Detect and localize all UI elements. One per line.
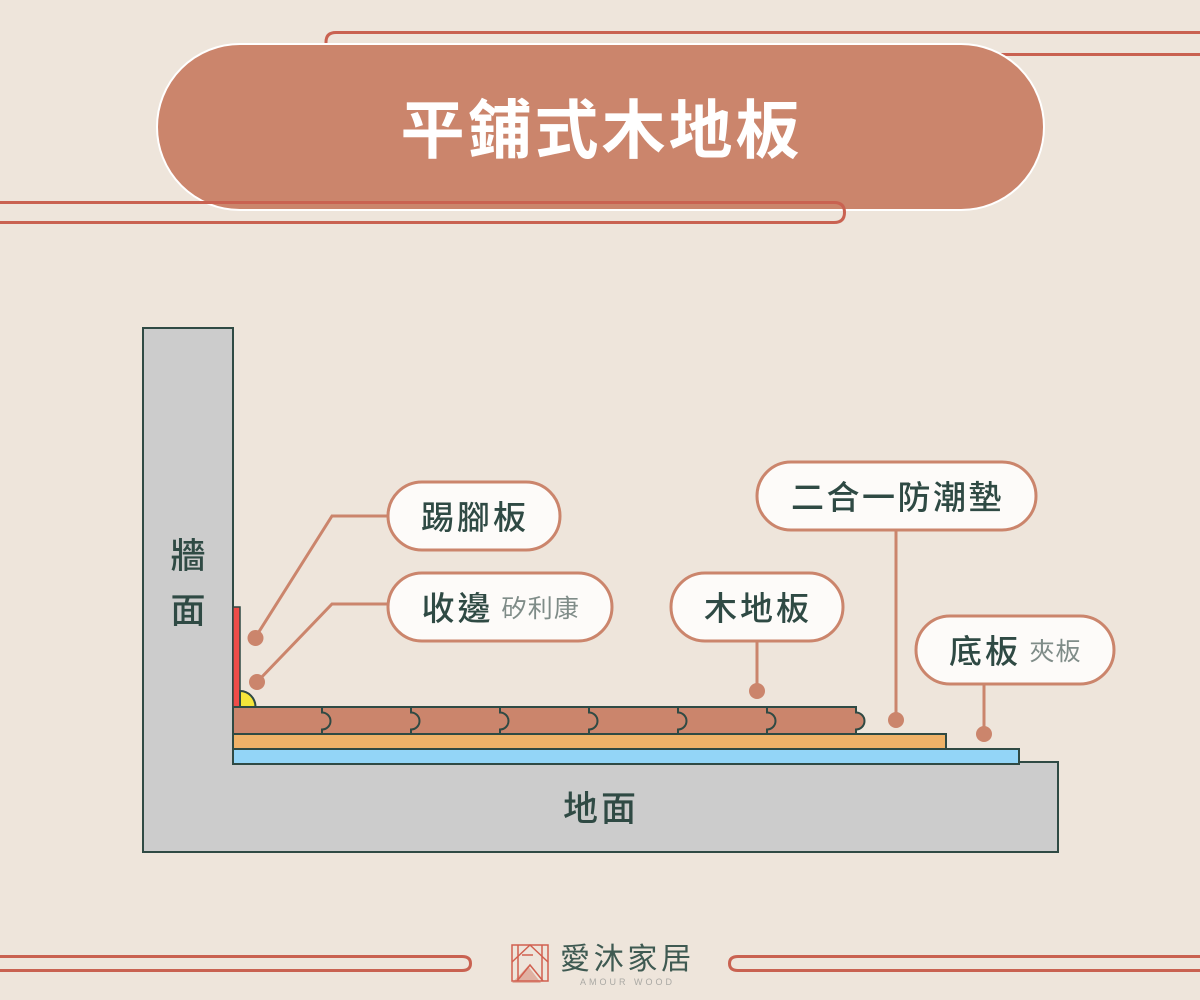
callout: edge finish: 矽利康 [502,595,580,623]
underlay blue layer [233,749,1019,764]
callout: subfloor: 底板 [949,633,1021,670]
underlay orange layer [233,734,946,749]
callout: subfloor [916,616,1114,742]
callout: baseboard: 踢腳板 [421,499,529,536]
title: 平鋪式木地板 [400,95,802,167]
callout: subfloor: 夾板 [1030,638,1082,666]
lower banner rail [0,202,844,222]
silicone edge [240,691,256,707]
callout: moisture pad [757,462,1036,728]
brand subtitle: AMOUR WOOD [580,977,675,987]
wood planks [233,707,864,734]
brand name: 愛沐家居 [560,943,695,976]
wall label lower: 面 [170,592,206,631]
callout: moisture pad: 二合一防潮墊 [791,479,1004,516]
callout: wood floor [671,573,843,699]
title banner [157,44,1044,210]
wall and ground [143,328,1058,852]
callout: baseboard [248,482,560,646]
logo mark [512,945,548,983]
callout: edge finish [249,573,612,690]
footer rail right [730,956,1200,970]
ground label: 地面 [563,790,639,829]
callout: edge finish: 收邊 [422,590,494,627]
logo [512,943,695,987]
wall label: 牆 [170,537,206,576]
floor section diagram [143,328,1058,852]
top decorative rail [326,32,1200,54]
footer rail left [0,956,470,970]
baseboard [233,607,240,707]
callout: wood floor: 木地板 [704,590,812,627]
